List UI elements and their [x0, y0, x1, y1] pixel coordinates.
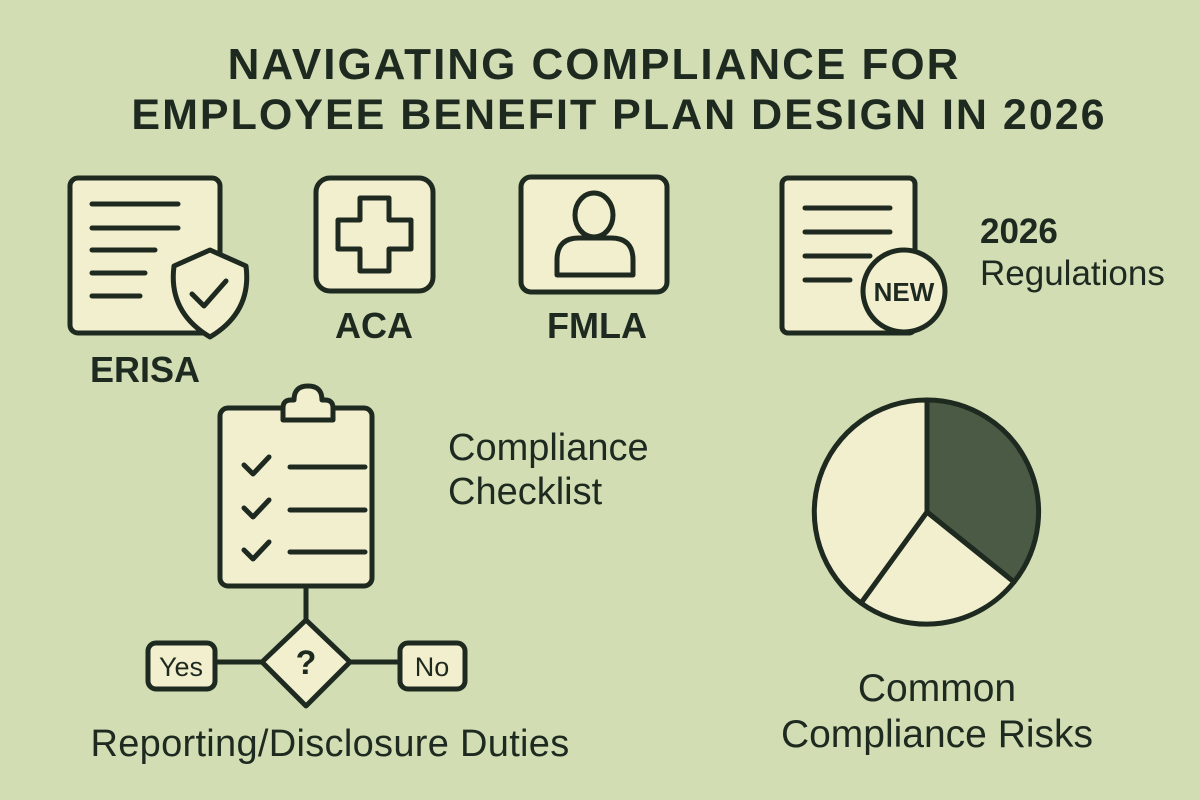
flowchart: decision: [148, 586, 465, 706]
label: Common Compliance Risks: [781, 667, 1093, 756]
label: 2026 Regulations: Regulations: [980, 254, 1165, 293]
label: ERISA: ERISA: [90, 349, 200, 390]
flowchart: decision: ?: [296, 644, 316, 682]
label: Compliance Checklist: Checklist: [448, 471, 603, 513]
title: NAVIGATING COMPLIANCE FOR: [228, 40, 960, 89]
label: FMLA: FMLA: [547, 305, 647, 346]
label: Compliance Checklist: Compliance: [448, 427, 649, 469]
label: 2026 Regulations: [980, 212, 1165, 293]
label: ACA: ACA: [335, 305, 413, 346]
title: [131, 40, 1107, 139]
flowchart: decision: Yes: [159, 652, 203, 682]
label: Compliance Checklist: [448, 427, 649, 513]
icon: ERISA document with shield: [70, 178, 247, 337]
icon: compliance checklist clipboard: [220, 386, 372, 586]
icon: 2026 new regulations document: NEW: [874, 277, 935, 307]
label: 2026 Regulations: 2026: [980, 212, 1058, 251]
label: Reporting/Disclosure Duties: Reporting/Disclosure Duties: [90, 723, 570, 765]
icon: 2026 new regulations document: [782, 178, 945, 333]
icon: FMLA person: [521, 177, 667, 292]
flowchart: decision: No: [415, 652, 449, 682]
label: Common Compliance Risks: Compliance Risks: [781, 713, 1093, 756]
pie chart: common compliance risks: [814, 400, 1039, 624]
icon: ACA medical cross: [316, 178, 433, 291]
label: Common Compliance Risks: Common: [858, 667, 1016, 710]
title: EMPLOYEE BENEFIT PLAN DESIGN IN 2026: [131, 91, 1107, 139]
